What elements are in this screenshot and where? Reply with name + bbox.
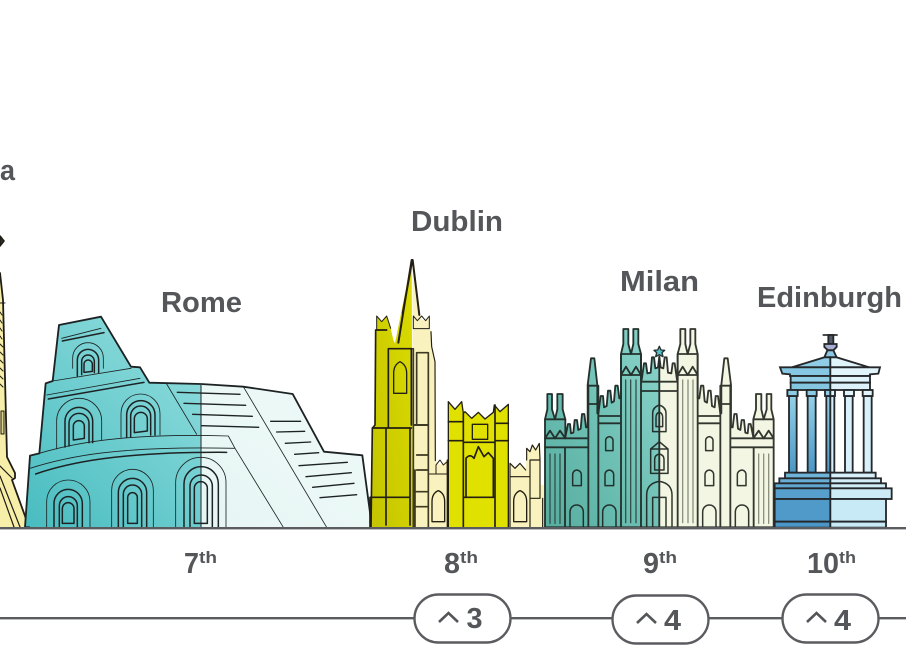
- finial: [823, 335, 838, 357]
- rank: 8th: th: [460, 548, 478, 567]
- timeline line: [0, 617, 906, 619]
- columns: [787, 390, 873, 473]
- rank: 10th: 10: [807, 548, 839, 580]
- landmark: Rome Colosseum: [25, 317, 372, 527]
- rank: 8th: [444, 548, 478, 580]
- landmark: Dublin cathedral: [370, 260, 553, 527]
- landmark: partial spire of previous city: [0, 236, 29, 527]
- rank: 7th: th: [199, 548, 217, 567]
- stepped base: [775, 473, 892, 528]
- right half of cathedral: [659, 329, 774, 527]
- badge: up 4 (9th): [612, 596, 708, 644]
- rank: 10th: th: [839, 548, 856, 567]
- badge: up 4 (10th): 4: [834, 605, 851, 637]
- ground line: [0, 527, 906, 529]
- rank: 8th: 8: [444, 548, 460, 580]
- rank: 9th: 9: [643, 548, 659, 580]
- label: Rome: Rome: [161, 287, 242, 319]
- rank: 7th: 7: [184, 548, 199, 580]
- centre line and star: [654, 346, 665, 527]
- badge: up 4 (9th): 4: [664, 605, 681, 637]
- landmark: Edinburgh monument: [775, 335, 892, 528]
- rank: 9th: [643, 548, 677, 580]
- rank: 10th: [807, 548, 856, 580]
- landmark: Milan cathedral: [545, 329, 774, 527]
- badge: up 3: [414, 594, 510, 642]
- label: Milan: Milan: [620, 266, 699, 298]
- rank: 7th: [184, 548, 217, 580]
- rank: 9th: th: [659, 548, 677, 567]
- badge: up 4 (10th): [782, 594, 878, 642]
- label: Edinburgh: Edinburgh: [757, 282, 902, 314]
- roof and entablature: [792, 357, 830, 367]
- label: partial city name: a: [0, 155, 16, 187]
- label: Dublin: Dublin: [411, 206, 503, 238]
- left half of cathedral: [545, 329, 659, 527]
- badge: up 3: 3: [466, 603, 482, 635]
